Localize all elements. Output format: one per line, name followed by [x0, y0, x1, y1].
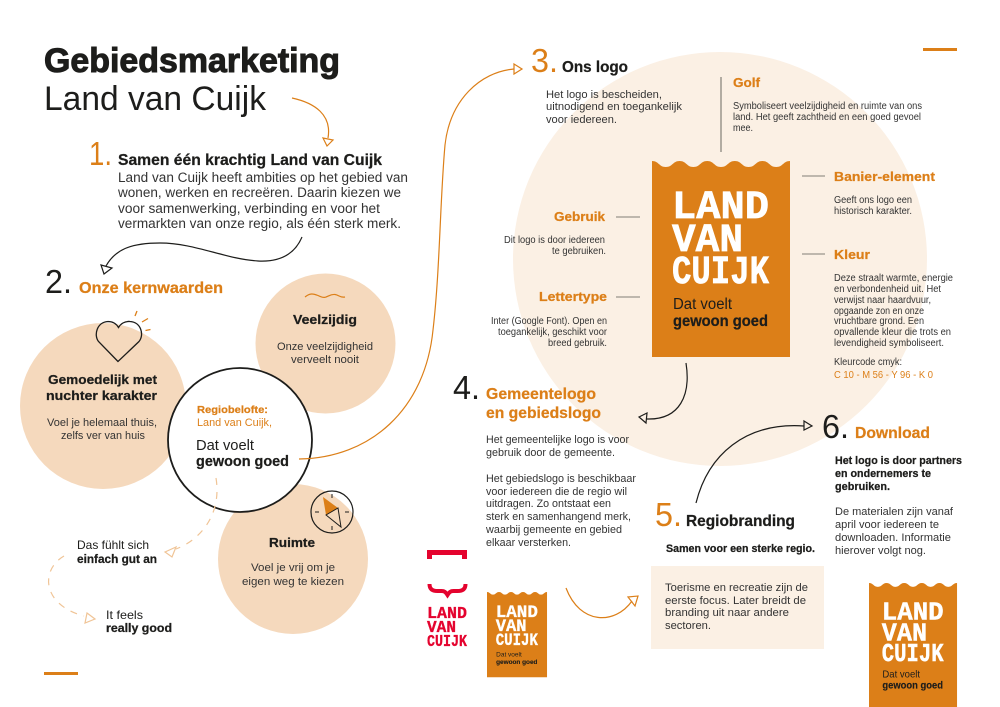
- small area logo: [487, 592, 547, 677]
- red municipality logo: LAND: [427, 604, 467, 623]
- section 6: download: gebruiken.: [835, 481, 890, 493]
- section 3: ons logo: [531, 42, 683, 126]
- callout: kleur: opgaande zon en onze: [834, 306, 924, 317]
- main logo: LAND: [672, 186, 769, 231]
- title: Gebiedsmarketing: [44, 42, 340, 80]
- section 5: regiobranding: 5.: [655, 496, 682, 533]
- section 3: ons logo: 3.: [531, 42, 558, 79]
- dashed arrow: to german phrase: [165, 478, 217, 557]
- callout: lettertype: Lettertype: [539, 289, 607, 304]
- section 6: download: Download: [855, 425, 930, 442]
- callout: lettertype: [491, 289, 640, 349]
- callout: kleur: en verbondenheid uit. Het: [834, 284, 941, 295]
- callout: kleur: C 10 - M 56 - Y 96 - K 0: [834, 370, 933, 381]
- section 5: regiobranding: Regiobranding: [686, 513, 795, 530]
- callout: kleur: Kleur: [834, 247, 870, 262]
- text: das fuhlt sich: [77, 538, 157, 566]
- heading: onze kernwaarden: 2.: [45, 263, 72, 300]
- accent bar top right: [923, 48, 957, 51]
- callout: gebruik: te gebruiken.: [552, 246, 606, 257]
- small area logo: LAND: [496, 604, 538, 623]
- callout: kleur: Kleurcode cmyk:: [834, 357, 902, 368]
- section 3: ons logo: Het logo is bescheiden,: [546, 89, 662, 101]
- heading: onze kernwaarden: [45, 263, 223, 300]
- section 1: samen een krachtig: Samen één krachtig Land van Cuijk: [118, 152, 382, 169]
- callout: banier-element: Banier-element: [834, 169, 936, 184]
- text: das fuhlt sich: Das fühlt sich: [77, 538, 149, 552]
- panel: gemoedelijk: nuchter karakter: [46, 389, 157, 403]
- panel: ruimte: [218, 484, 368, 634]
- callout: lettertype: Inter (Google Font). Open en: [491, 316, 607, 327]
- large download logo: LAND: [882, 598, 944, 627]
- icon: heart: [96, 311, 150, 362]
- panel: gemoedelijk: zelfs ver van huis: [61, 430, 145, 442]
- panel: gemoedelijk: Gemoedelijk met: [48, 373, 158, 387]
- section 6: download: april voor iedereen te: [835, 519, 939, 531]
- text: das fuhlt sich: einfach gut an: [77, 552, 157, 566]
- arrow: regiobranding to download: [696, 421, 812, 503]
- section 6: download: downloaden. Informatie: [835, 532, 951, 544]
- section 4: gemeentelogo: voor iedereen die de regio wil: [486, 486, 627, 498]
- large download logo: CUIJK: [882, 640, 944, 669]
- section 3: ons logo: Ons logo: [562, 59, 628, 76]
- small area logo: VAN: [496, 618, 527, 637]
- callout: golf: [721, 75, 922, 152]
- section 6: download: [822, 408, 962, 557]
- large download logo: [869, 583, 957, 707]
- section 1: samen een krachtig: wonen, werken en recreëren. Daarin kiezen we: [117, 185, 401, 200]
- section 6: download: 6.: [822, 408, 849, 445]
- section 4: gemeentelogo: gebruik door de gemeente.: [486, 447, 615, 459]
- red municipality logo: [427, 550, 467, 651]
- panel: veelzijdig: verveelt nooit: [291, 354, 359, 366]
- section 1: samen een krachtig: Land van Cuijk heeft ambities op het gebied van: [118, 170, 408, 185]
- text: it feels: really good: [106, 621, 172, 635]
- section 6: download: De materialen zijn vanaf: [835, 506, 954, 518]
- section 6: download: en ondernemers te: [835, 468, 931, 480]
- callout: lettertype: breed gebruik.: [548, 338, 607, 349]
- heading: onze kernwaarden: Onze kernwaarden: [79, 280, 223, 297]
- panel: regiobelofte: Land van Cuijk,: [197, 417, 272, 429]
- callout: gebruik: Dit logo is door iedereen: [504, 235, 605, 246]
- main logo: VAN: [672, 219, 743, 264]
- callout: kleur: opvallende kleur die trots en: [834, 327, 951, 338]
- arrow: title to step 1: [292, 98, 333, 146]
- section 4: gemeentelogo: sterk en samenhangend merk,: [486, 511, 631, 523]
- panel: toerisme box: Toerisme en recreatie zijn de: [665, 582, 808, 594]
- callout: banier-element: Geeft ons logo een: [834, 195, 912, 206]
- panel: toerisme box: branding uit naar andere: [665, 607, 789, 619]
- section 4: gemeentelogo: waarbij gemeente en gebied: [485, 524, 622, 536]
- section 4: gemeentelogo: Gemeentelogo: [486, 386, 596, 403]
- small area logo: Dat voelt: [496, 651, 522, 658]
- panel: veelzijdig: [256, 274, 396, 414]
- section 1: samen een krachtig: [89, 135, 408, 231]
- main logo: CUIJK: [672, 251, 769, 296]
- small area logo: gewoon goed: [496, 659, 537, 666]
- section 3: ons logo: uitnodigend en toegankelijk: [546, 101, 683, 113]
- section 4: gemeentelogo: [453, 369, 636, 549]
- arrow: step 1 to step 2: [101, 237, 302, 274]
- panel: toerisme box: sectoren.: [665, 620, 711, 632]
- callout: kleur: levendigheid symboliseert.: [834, 338, 944, 349]
- main logo: gewoon goed: [673, 313, 768, 330]
- text: it feels: [106, 608, 172, 635]
- panel: regiobelofte: Regiobelofte:: [197, 404, 268, 416]
- section 1: samen een krachtig: vermarkten van onze regio, als één sterk merk.: [118, 216, 401, 231]
- panel: regiobelofte: [168, 368, 312, 512]
- panel: ruimte: Voel je vrij om je: [251, 562, 335, 574]
- section 1: samen een krachtig: 1.: [89, 135, 112, 172]
- section 1: samen een krachtig: voor samenwerking, verbinding en voor het: [118, 201, 380, 216]
- panel: ruimte: Ruimte: [269, 536, 315, 550]
- callout: kleur: vruchtbare grond. Een: [834, 316, 924, 327]
- large download logo: VAN: [882, 619, 927, 648]
- callout: gebruik: Gebruik: [554, 209, 606, 224]
- section 4: gemeentelogo: en gebiedslogo: [486, 405, 601, 422]
- section 4: gemeentelogo: Het gemeentelijke logo is voor: [486, 434, 629, 446]
- panel: regiobelofte: gewoon goed: [196, 453, 289, 470]
- section 5: regiobranding: Samen voor een sterke regio.: [666, 543, 815, 555]
- section 6: download: Het logo is door partners: [835, 455, 962, 467]
- section 4: gemeentelogo: uitdragen. Zo ontstaat een: [486, 498, 611, 510]
- main logo: [652, 161, 790, 357]
- section 4: gemeentelogo: 4.: [453, 369, 480, 406]
- accent bar bottom left: [44, 672, 78, 675]
- section 6: download: hierover volgt nog.: [835, 545, 926, 557]
- panel: toerisme box: eerste focus. Later breidt de: [665, 595, 806, 607]
- callout: golf: mee.: [733, 123, 753, 134]
- section 5: regiobranding: [655, 496, 815, 555]
- arrow: logo to gemeentelogo: [639, 363, 687, 423]
- callout: golf: Symboliseert veelzijdigheid en ruimte van ons: [733, 101, 922, 112]
- callout: banier-element: [802, 169, 936, 217]
- callout: lettertype: toegankelijk, geschikt voor: [498, 327, 608, 338]
- callout: golf: Golf: [733, 75, 761, 90]
- red municipality logo: CUIJK: [427, 632, 467, 651]
- panel: gemoedelijk: [20, 323, 186, 489]
- section 3: ons logo: voor iedereen.: [546, 114, 617, 126]
- title: [44, 42, 340, 118]
- large download logo: Dat voelt: [882, 669, 920, 680]
- arrow: logos to box: [566, 588, 638, 618]
- section 4: gemeentelogo: Het gebiedslogo is beschikbaar: [486, 473, 636, 485]
- panel: regiobelofte: Dat voelt: [196, 437, 255, 454]
- icon: compass: [311, 491, 353, 533]
- arrow: regiobelofte to logo: [299, 64, 522, 459]
- callout: kleur: Deze straalt warmte, energie: [834, 273, 953, 284]
- callout: gebruik: [504, 209, 640, 257]
- main logo: Dat voelt: [673, 296, 733, 313]
- panel: veelzijdig: Onze veelzijdigheid: [277, 341, 373, 353]
- section 4: gemeentelogo: elkaar versterken.: [486, 537, 571, 549]
- panel: ruimte: eigen weg te kiezen: [242, 576, 344, 588]
- callout: golf: land. Het geeft zachtheid en een goed gevoel: [733, 112, 921, 123]
- small area logo: CUIJK: [496, 632, 538, 651]
- callout: kleur: verwijst naar haardvuur,: [834, 295, 931, 306]
- background cream circle: [513, 52, 927, 466]
- panel: veelzijdig: Veelzijdig: [293, 313, 357, 327]
- callout: kleur: [802, 247, 953, 381]
- large download logo: gewoon goed: [882, 680, 943, 691]
- dashed arrow: to english phrase: [49, 556, 95, 623]
- red municipality logo: VAN: [427, 618, 456, 637]
- panel: gemoedelijk: Voel je helemaal thuis,: [47, 417, 157, 429]
- title: Land van Cuijk: [44, 80, 267, 118]
- callout: banier-element: historisch karakter.: [834, 206, 912, 217]
- text: it feels: It feels: [106, 608, 143, 622]
- panel: toerisme box: [651, 566, 824, 649]
